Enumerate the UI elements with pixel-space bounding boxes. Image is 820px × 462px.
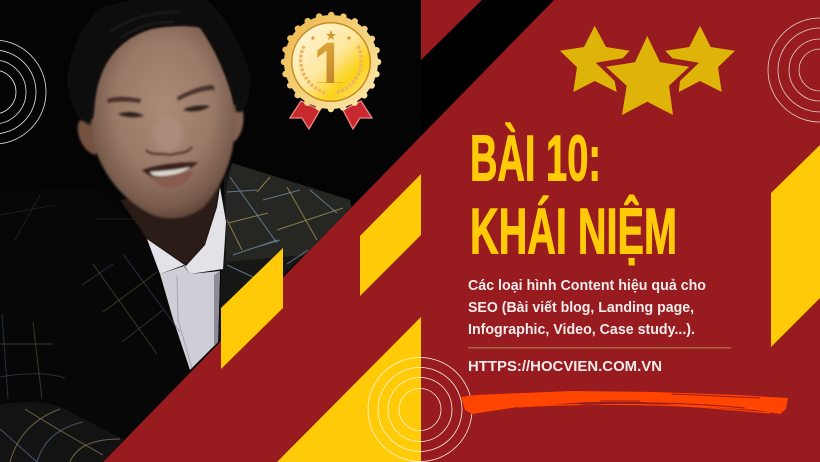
title: KHÁI NIỆM xyxy=(470,194,677,268)
yellow block: centre parallelogram xyxy=(360,174,421,296)
title: BÀI 10: xyxy=(470,122,601,194)
rings: bottom centre xyxy=(368,358,472,462)
yellow block: bottom triangle xyxy=(277,317,421,462)
medal laurels xyxy=(301,46,361,93)
website url: HTTPS://HOCVIEN.COM.VN xyxy=(468,358,662,375)
medal stars xyxy=(311,30,351,40)
right eye xyxy=(183,105,210,111)
yellow block: right parallelogram xyxy=(771,145,820,347)
medal ribbons xyxy=(290,101,372,129)
description text: SEO (Bài viết blog, Landing page, xyxy=(468,300,694,316)
mouth xyxy=(148,171,194,188)
right brow xyxy=(177,85,215,101)
description text: Infographic, Video, Case study...). xyxy=(468,322,695,338)
black diagonal band xyxy=(421,0,554,136)
description text: Các loại hình Content hiệu quả cho xyxy=(468,278,706,294)
three stars xyxy=(560,26,735,115)
medal scalloped badge xyxy=(284,15,378,109)
neck xyxy=(120,180,220,266)
yellow block: lower left parallelogram xyxy=(221,248,283,369)
hair xyxy=(67,0,251,125)
medal number: 1 xyxy=(314,28,344,104)
portrait photo xyxy=(0,0,421,462)
jacket plaid xyxy=(0,177,343,462)
ears xyxy=(78,118,100,155)
left eye xyxy=(118,112,144,117)
shirt collar xyxy=(147,187,226,274)
nose xyxy=(155,121,182,154)
shirt body xyxy=(160,266,220,370)
title xyxy=(470,122,677,268)
rings: top right xyxy=(768,18,820,122)
medal xyxy=(284,15,378,129)
left brow xyxy=(107,97,141,103)
orange brush stroke xyxy=(461,391,788,414)
rings: left xyxy=(0,40,46,144)
face xyxy=(93,26,235,218)
description text xyxy=(468,278,706,338)
